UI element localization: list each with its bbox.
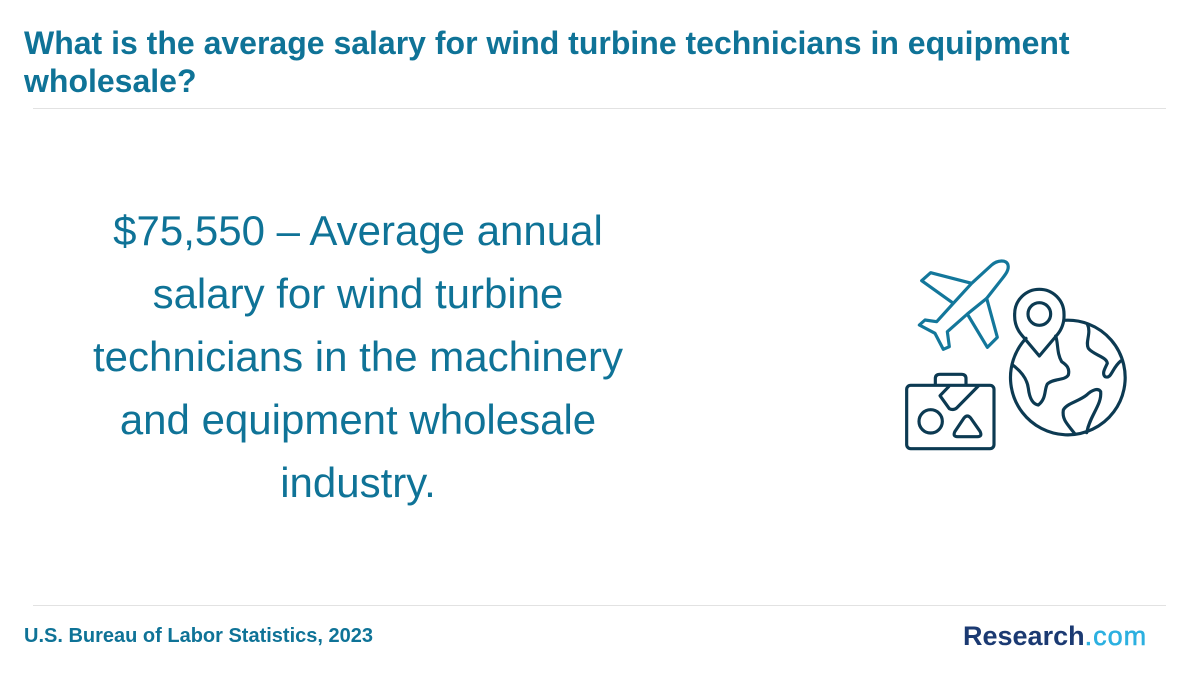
source text: U.S. Bureau of Labor Statistics, 2023	[24, 625, 373, 647]
main statement: technicians in the machinery	[93, 333, 623, 380]
main statement: salary for wind turbine	[153, 270, 563, 317]
main statement: and equipment wholesale	[120, 396, 596, 443]
main statement: industry.	[280, 459, 436, 506]
icon: travel, plane, globe and suitcase	[905, 259, 1127, 450]
icon: map pin	[1015, 289, 1064, 356]
main statement: $75,550 – Average annual	[113, 207, 603, 254]
icon: globe	[1011, 320, 1125, 435]
icon: airplane	[919, 261, 1008, 349]
main statement	[93, 207, 623, 506]
icon: suitcase	[907, 374, 994, 449]
logo: Research.com: Research.com	[963, 621, 1147, 651]
title: What is the average salary for wind turbine technicians in equipment wholesale?	[24, 25, 1070, 99]
